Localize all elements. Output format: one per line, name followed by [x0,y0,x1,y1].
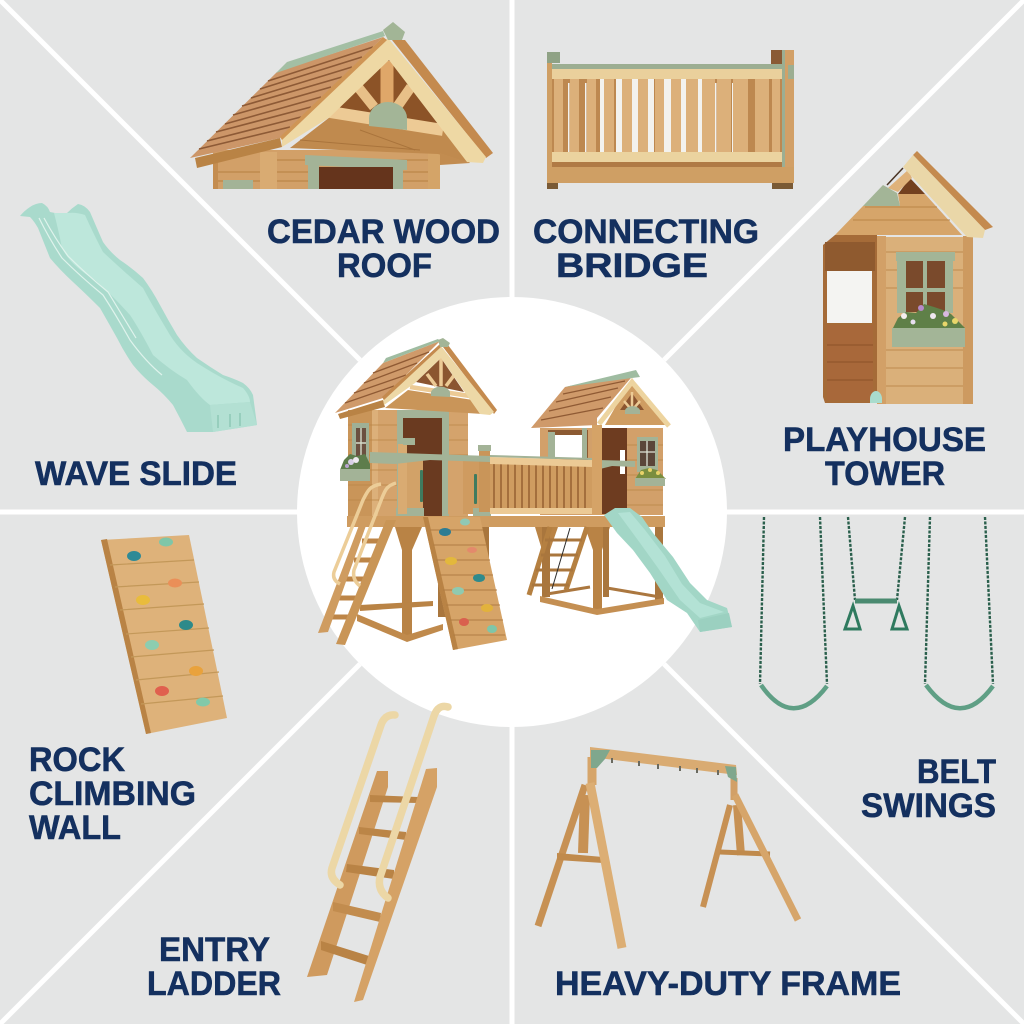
panel: playhouse tower [783,151,993,493]
panel: wave slide [20,203,257,493]
heading: cedar wood roof: ROOF [337,247,432,285]
left tower [335,338,497,518]
heading: rock climbing wall: CLIMBING [29,775,196,813]
center circle: full playset [297,297,732,727]
heading: playhouse tower: TOWER [825,455,945,493]
climbing wall [423,517,507,650]
heading: heavy-duty frame: HEAVY-DUTY FRAME [555,965,901,1003]
panel: heavy-duty frame [538,747,901,1003]
icon: swings [760,517,993,708]
heading: playhouse tower: PLAYHOUSE [783,421,986,459]
heading: rock climbing wall: WALL [29,809,121,847]
heading: belt swings: SWINGS [861,787,996,825]
icon: climbing wall [101,535,227,734]
icon: playhouse [823,151,993,404]
heading: entry ladder: ENTRY [159,931,270,969]
panel: rock climbing wall [29,535,227,847]
heading: belt swings: BELT [917,753,996,791]
right tower [531,370,669,515]
icon: slide [20,203,257,432]
slide [604,508,732,632]
heading: wave slide: WAVE SLIDE [35,455,237,493]
heading: connecting bridge: CONNECTING [533,213,759,251]
icon: a-frame [538,747,798,948]
panel: entry ladder [147,706,448,1003]
icon: ladder [307,706,448,1002]
entry ladder [318,483,396,645]
icon: roof [190,22,493,189]
heading: entry ladder: LADDER [147,965,281,1003]
heading: cedar wood roof: CEDAR WOOD [267,213,500,251]
connecting bridge rail [490,455,592,514]
heading: rock climbing wall: ROCK [29,741,125,779]
panel: belt swings [760,517,996,825]
deck and lower frame [347,516,665,642]
icon: bridge rail [547,50,794,189]
heading: connecting bridge: BRIDGE [556,247,708,285]
panel: connecting bridge [533,50,794,285]
panel: cedar wood roof [190,22,500,285]
